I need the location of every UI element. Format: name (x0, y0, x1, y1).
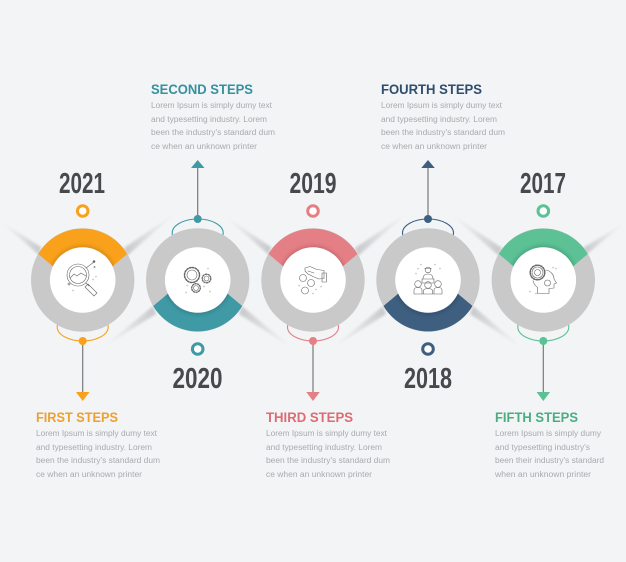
donut: teal (153, 238, 242, 331)
description: fourth steps: Lorem Ipsum is simply dumy text (381, 101, 503, 110)
description: fifth steps (494, 429, 604, 479)
description: fourth steps: been the industry's standard dum (381, 128, 505, 137)
heading: second steps: SECOND STEPS (151, 82, 253, 97)
description: first steps: and typesetting industry. Lorem (36, 443, 152, 452)
connector loop: pink (288, 313, 338, 341)
heading: fourth steps: FOURTH STEPS (381, 82, 482, 97)
description: second steps: and typesetting industry. Lorem (151, 115, 267, 124)
description: fifth steps: when an unknown printer (494, 470, 591, 479)
description: fourth steps (381, 101, 505, 151)
marker ring: 2017 (538, 206, 549, 216)
description: fourth steps: and typesetting industry. Lorem (381, 115, 497, 124)
description: first steps: ce when an unknown printer (36, 470, 142, 479)
description: fourth steps: ce when an unknown printer (381, 142, 487, 151)
marker ring: 2019 (308, 206, 318, 216)
marker ring: 2021 (77, 206, 88, 216)
description: second steps (151, 101, 275, 151)
description: third steps: and typesetting industry. Lorem (266, 443, 382, 452)
icon: speaker and audience (414, 264, 442, 294)
step 1: first steps (36, 168, 160, 479)
year: 2019: 2019 (290, 168, 336, 200)
description: third steps: been the industry's standard dum (266, 456, 390, 465)
description: second steps: ce when an unknown printer (151, 142, 257, 151)
year: 2018: 2018 (404, 363, 452, 395)
icon: hand dropping coins (299, 266, 326, 294)
description: fifth steps: been their industry's standard (495, 456, 604, 465)
arrow: up navy (421, 160, 435, 223)
step 4: fourth steps (381, 82, 505, 395)
connector loop: teal (172, 219, 223, 247)
year: 2021: 2021 (59, 168, 105, 200)
arrow: up teal (191, 160, 204, 223)
description: fifth steps: and typesetting industry's (495, 443, 590, 452)
connector loop: green (518, 313, 569, 341)
donut: orange (38, 229, 127, 322)
donut: navy (384, 238, 472, 331)
connector loop: navy (402, 219, 454, 247)
description: third steps: ce when an unknown printer (266, 470, 372, 479)
marker ring: 2018 (423, 344, 433, 354)
description: second steps: been the industry's standard dum (151, 128, 275, 137)
icon: head with gears (530, 265, 556, 294)
description: third steps: Lorem Ipsum is simply dumy text (266, 429, 388, 438)
heading: third steps: THIRD STEPS (266, 410, 353, 425)
year: 2020: 2020 (172, 363, 222, 395)
arrow: down pink (306, 337, 320, 401)
ribbon fold shadows (0, 211, 626, 350)
arrow: down orange (76, 337, 90, 401)
year: 2017: 2017 (520, 168, 566, 200)
icon: gears (184, 268, 211, 293)
description: third steps (266, 429, 390, 479)
step 3: third steps (266, 168, 390, 479)
heading: first steps: FIRST STEPS (36, 410, 118, 425)
heading: fifth steps: FIFTH STEPS (495, 410, 578, 425)
description: fifth steps: Lorem Ipsum is simply dumy (495, 429, 601, 438)
description: second steps: Lorem Ipsum is simply dumy text (151, 101, 273, 110)
donut: green (499, 229, 588, 322)
marker ring: 2020 (192, 344, 203, 354)
arrow: down green (537, 337, 550, 401)
icon: magnifier with chart (67, 260, 97, 296)
step 5: fifth steps (494, 168, 604, 479)
description: first steps: Lorem Ipsum is simply dumy text (36, 429, 158, 438)
donut: pink (268, 229, 358, 322)
step 2: second steps (151, 82, 275, 395)
description: first steps (36, 429, 160, 479)
description: first steps: been the industry's standard dum (36, 456, 160, 465)
connector loop: orange (57, 313, 108, 341)
